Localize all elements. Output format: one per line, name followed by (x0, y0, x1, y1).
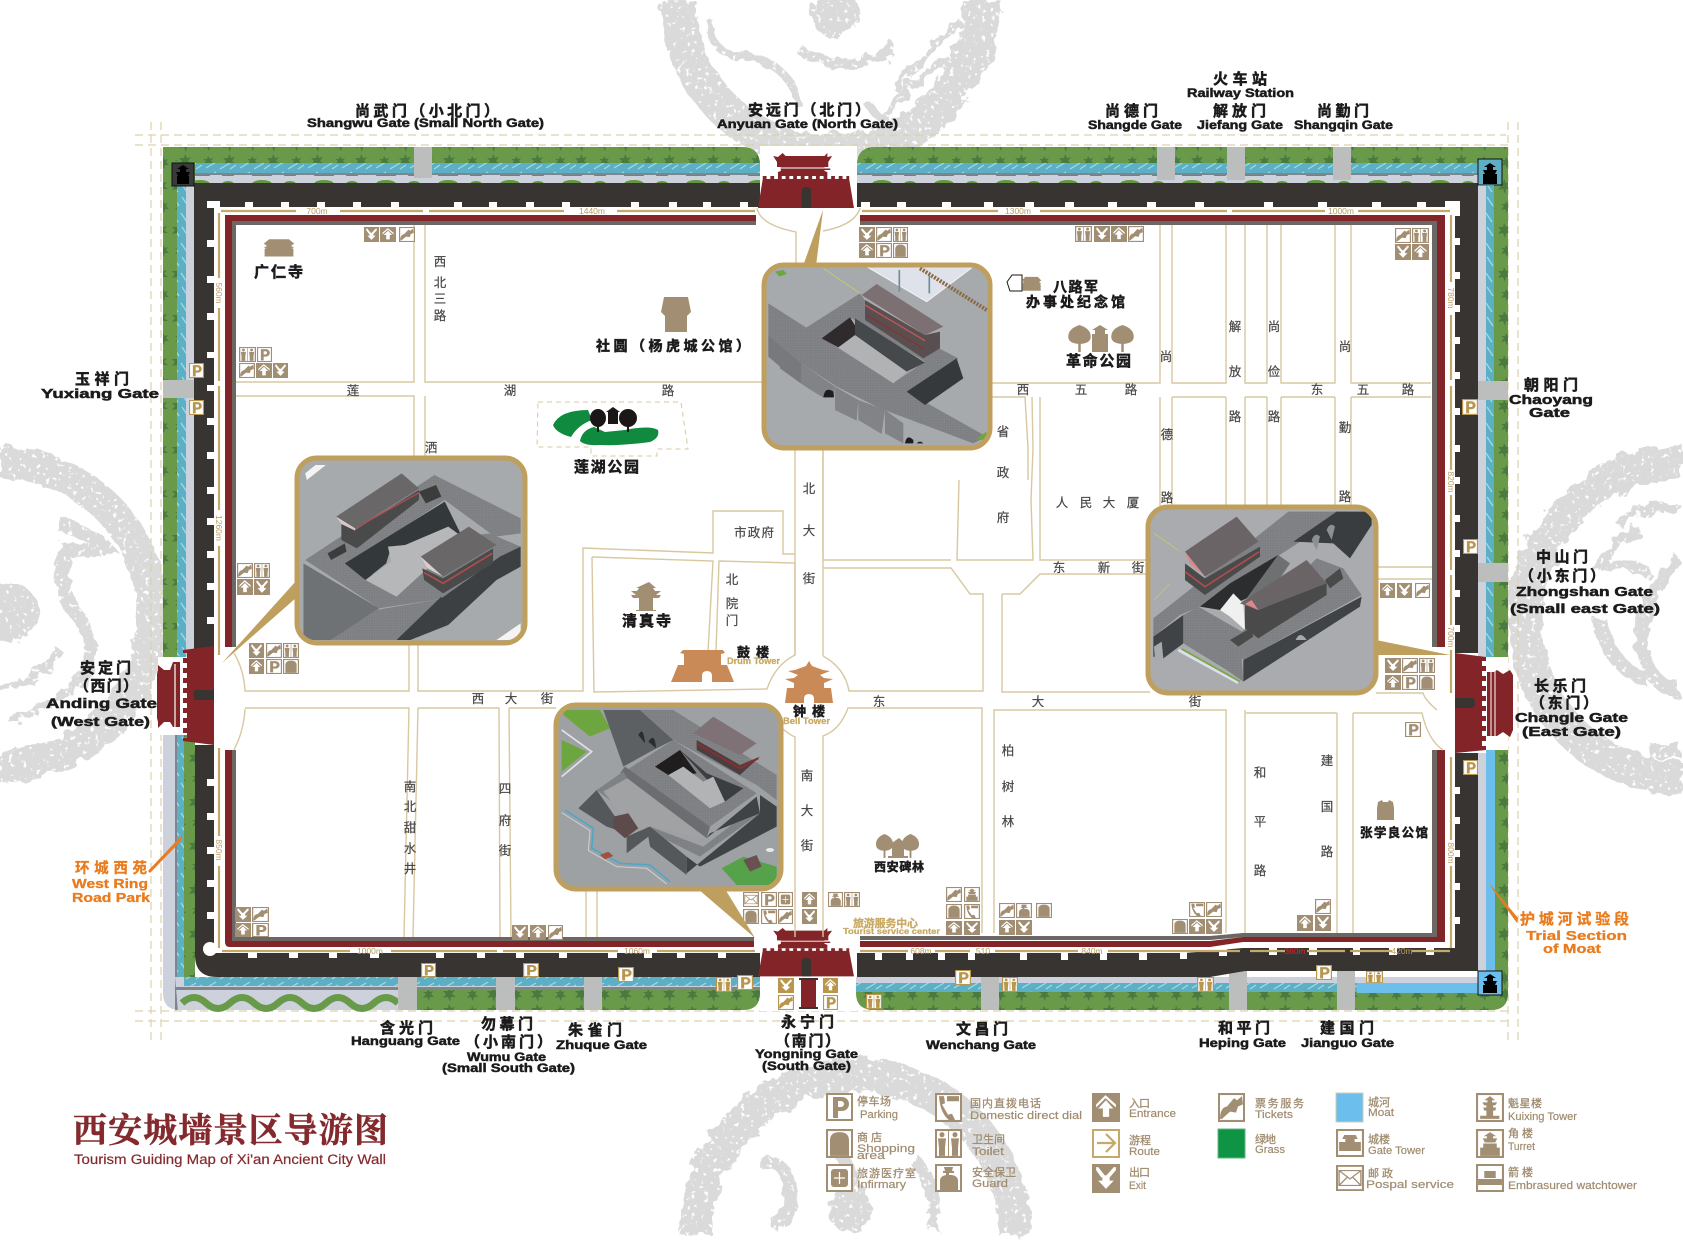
legend: parking: Parking (860, 1109, 898, 1121)
inset: south gate 3D (552, 701, 785, 938)
legend: grass: Grass (1255, 1144, 1286, 1156)
dimension labels: 1440m (579, 206, 605, 216)
legend: phone (936, 1094, 1082, 1122)
gate label: Wenchang (926, 1020, 1036, 1052)
road names: 莲 (347, 384, 360, 398)
dimension labels: 1060m (624, 946, 650, 956)
gate label: Changle: Changle Gate (1515, 710, 1628, 725)
gate label: Zhongshan: (Small east Gate) (1510, 601, 1660, 616)
dimension labels: 780m (1446, 287, 1456, 309)
dimension labels: 700m (1446, 626, 1456, 648)
road names: 府 (997, 510, 1009, 525)
road names: 大 (803, 524, 815, 538)
dimension labels: 850m (214, 839, 224, 861)
gate label: Jianguo: 建国门 (1320, 1019, 1374, 1037)
road names: 和 (1254, 766, 1266, 780)
park belt: south left (175, 977, 760, 1010)
gate label: Shangqin (1294, 102, 1393, 132)
inset: north gate 3D (760, 210, 996, 452)
gate label: Yuxiang (41, 370, 159, 401)
road names: 路 (1229, 409, 1242, 424)
legend: grass (1218, 1129, 1286, 1158)
road names: 路 (1254, 863, 1267, 878)
gate label: Chaoyang: Chaoyang (1509, 392, 1593, 407)
landmark: Eighth Route Army office (1007, 275, 1125, 310)
legend: shopping: area (857, 1150, 886, 1162)
road names: 路 (1321, 844, 1334, 859)
landmark: Great Mosque (622, 582, 671, 630)
road names: 街 (801, 839, 813, 853)
dimension labels: 1000m (1328, 206, 1354, 216)
gate label: Zhuque: 朱雀门 (568, 1021, 622, 1039)
road names: 街 (1132, 561, 1144, 575)
legend: shopping (827, 1130, 915, 1162)
dimension labels: 560m (214, 282, 224, 304)
road names: 尚 (1160, 350, 1172, 364)
park belt: west lower (163, 735, 195, 1010)
title (73, 1112, 388, 1167)
gate label: Heping: Heping Gate (1199, 1036, 1286, 1050)
road names: 树 (1002, 779, 1014, 794)
road names: 路 (1268, 409, 1281, 424)
gate label: Jianguo (1301, 1019, 1394, 1050)
gate label: Yuxiang: 玉祥门 (75, 370, 129, 388)
legend: gate tower (1337, 1130, 1425, 1157)
road names: 大 (801, 804, 813, 818)
landmark: Revolution Park (1066, 325, 1134, 370)
gate label: Zhongshan: （小东门） (1519, 567, 1605, 585)
landmark: Forest of Steles: 西安碑林 (874, 859, 924, 874)
dimension labels: 510 (976, 946, 990, 956)
medallion: top dragon (678, 0, 982, 152)
gate label: Wumu: (Small South Gate) (442, 1061, 575, 1075)
gate label: Hanguang: 含光门 (380, 1019, 433, 1037)
legend: gate tower: Gate Tower (1368, 1145, 1425, 1157)
gate label: Shangde (1088, 102, 1182, 132)
road names: 厦 (1127, 496, 1139, 510)
gate label: Shangqin: 尚勤门 (1317, 102, 1369, 120)
gate openings (760, 146, 857, 1011)
park belt: south right (856, 977, 1508, 1010)
legend: entrance: 入口 (1129, 1098, 1150, 1110)
park belt: top left (163, 147, 760, 183)
legend: exit (1092, 1164, 1150, 1193)
road names: 放 (1229, 364, 1242, 379)
gate label: Zhongshan (1510, 548, 1660, 616)
road names (347, 255, 1415, 878)
dimension labels: 700m (306, 206, 328, 216)
gate label: Anding: (West Gate) (51, 714, 150, 729)
landmark: Eighth Route Army office: 办事处纪念馆 (1026, 294, 1125, 310)
legend: shopping: Shopping (857, 1143, 915, 1155)
road names: 政 (997, 466, 1010, 480)
landmark: Lianhu Park (537, 402, 688, 476)
dimension labels: 1000m (357, 946, 383, 956)
gate label: Shangwu: 尚武门（小北门） (355, 102, 499, 120)
road names: 街 (541, 692, 553, 706)
legend: postal (1337, 1166, 1454, 1191)
callout: Trial Section of Moat: 护城河试验段 (1520, 910, 1629, 928)
gate label: Changle: （东门） (1530, 694, 1598, 712)
landmark: Zhang Xueliang residence (1360, 800, 1428, 840)
gate label: Anding: Anding Gate (46, 696, 158, 711)
gate label: Anyuan: 安远门（北门） (748, 101, 870, 119)
legend: infirmary: Infirmary (857, 1179, 907, 1191)
road names: 甜 (404, 821, 416, 835)
label: Railway Station: 火车站 (1213, 70, 1267, 88)
gate label: Wumu (442, 1015, 575, 1075)
medallion: left phoenix (0, 463, 152, 767)
legend: watchtower (1477, 1165, 1637, 1192)
gate: west (157, 646, 214, 745)
gate label: Yongning: (South Gate) (762, 1059, 851, 1073)
dashed guide lines (135, 122, 1518, 1045)
gate label: Yongning: Yongning Gate (755, 1047, 858, 1061)
road names: 人 (1056, 496, 1069, 510)
landmark: Tourist service center: Tourist service center (843, 926, 941, 936)
legend: guard: 安全保卫 (972, 1165, 1016, 1179)
gate label: Jiefang: 解放门 (1213, 102, 1266, 120)
road names: 省 (997, 425, 1009, 439)
road names: 路 (662, 383, 675, 398)
legend: toilet: Toilet (972, 1146, 1004, 1158)
gate label: Shangqin: Shangqin Gate (1294, 118, 1393, 132)
legend: entrance (1092, 1093, 1176, 1122)
gate label: Shangwu (307, 102, 544, 130)
road names: 街 (803, 572, 815, 586)
road names: 西 (434, 255, 446, 269)
legend: shopping: 商店 (857, 1130, 882, 1144)
title: Tourism Guiding Map of Xi'an Ancient City Wall (74, 1152, 386, 1167)
gate label: Yongning (755, 1013, 858, 1073)
road names: 北 (434, 276, 447, 290)
landmark: Forest of Steles (874, 834, 924, 874)
road names: 俭 (1268, 364, 1281, 379)
gate label: Changle: (East Gate) (1522, 724, 1621, 739)
legend: gate tower: 城楼 (1368, 1132, 1390, 1146)
callout: West Ring Road Park: Road Park (72, 890, 151, 905)
landmark: Tourist service center (843, 916, 941, 936)
legend: Kuixing tower (1477, 1094, 1577, 1123)
road names: 府 (499, 813, 511, 828)
gate: south (758, 928, 854, 976)
legend: route: Route (1129, 1146, 1160, 1158)
road names: 柏 (1002, 743, 1014, 758)
service icons on the map (235, 226, 1434, 940)
gate label: Jiefang (1197, 102, 1283, 132)
road names: 建 (1321, 754, 1334, 768)
legend: tickets: Tickets (1255, 1109, 1294, 1121)
landmark: Tourist service center: 旅游服务中心 (853, 916, 918, 930)
legend: Kuixing tower: Kuixing Tower (1508, 1111, 1577, 1123)
road names: 路 (1125, 382, 1138, 397)
wall body (194, 183, 1478, 977)
dimension labels: 420m (1391, 946, 1413, 956)
road names: 西 (1017, 383, 1029, 397)
callout: Trial Section of Moat: Trial Section (1526, 928, 1627, 943)
gate label: Hanguang: Hanguang Gate (351, 1034, 460, 1048)
landmark: Zhang Xueliang residence: 张学良公馆 (1360, 825, 1428, 840)
gate label: Chaoyang (1509, 376, 1593, 420)
landmark: Bell Tower: Bell Tower (783, 716, 831, 726)
landmark: Lianhu Park: 莲湖公园 (574, 459, 639, 476)
legend: turret: Turret (1508, 1141, 1535, 1153)
dimension labels: 1300m (1005, 206, 1031, 216)
legend: grass: 绿地 (1255, 1132, 1276, 1146)
legend: watchtower: 箭楼 (1508, 1165, 1533, 1179)
road names: 院 (726, 597, 739, 611)
legend: entrance: Entrance (1129, 1108, 1176, 1120)
landmark: Guangren Temple: 广仁寺 (254, 263, 303, 281)
landmark: Bell Tower: 钟楼 (793, 704, 825, 719)
dimension labels: 840m (1081, 946, 1103, 956)
callout: Trial Section of Moat: of Moat (1543, 941, 1602, 956)
legend: moat (1336, 1093, 1394, 1122)
south gate pavilion (799, 979, 818, 1008)
landmark: Yang Hucheng residence: 社圆（杨虎城公馆） (596, 338, 750, 354)
legend: infirmary: 旅游医疗室 (857, 1166, 916, 1180)
road names: 尚 (1339, 340, 1351, 354)
road names: 四 (499, 782, 511, 796)
legend: watchtower: Embrasured watchtower (1508, 1180, 1637, 1192)
road names: 西 (472, 692, 484, 706)
gate label: Shangde: Shangde Gate (1088, 118, 1182, 132)
legend: toilet: 卫生间 (972, 1132, 1005, 1146)
legend: exit: Exit (1129, 1180, 1146, 1192)
road names: 尚 (1268, 320, 1280, 334)
callout: West Ring Road Park: 环城西苑 (75, 859, 148, 877)
legend: route: 游程 (1129, 1134, 1151, 1147)
gate label: Yongning: 永宁门 (781, 1013, 834, 1031)
legend: turret (1477, 1126, 1535, 1157)
gate label: Chaoyang: Gate (1529, 405, 1570, 420)
park belt: west upper (163, 147, 195, 657)
legend: exit: 出口 (1129, 1165, 1150, 1179)
landmark: Revolution Park: 革命公园 (1066, 352, 1131, 370)
landmark: Great Mosque: 清真寺 (622, 612, 671, 630)
red inner wall line (225, 215, 1445, 947)
gate label: Shangde: 尚德门 (1105, 102, 1158, 120)
park belt: east (1478, 147, 1508, 1010)
medallion: right dragon (1525, 462, 1683, 778)
label: Railway Station: Railway Station (1187, 86, 1294, 100)
dimension labels: 1260m (214, 515, 224, 541)
dimension labels: 360m (1284, 946, 1306, 956)
road names: 街 (499, 844, 511, 858)
legend: phone: Domestic direct dial (970, 1110, 1082, 1122)
landmark: Bell Tower (783, 661, 833, 726)
dimension lines (219, 211, 1451, 951)
legend: parking (827, 1094, 898, 1121)
road names: 五 (1075, 383, 1087, 397)
legend: parking: 停车场 (857, 1094, 891, 1108)
landmark: Drum Tower: 鼓楼 (737, 645, 769, 660)
landmark: Drum Tower: Drum Tower (727, 656, 781, 666)
label: Railway Station (1187, 70, 1294, 100)
road names: 解 (1229, 320, 1241, 334)
road names: 洒 (425, 441, 437, 455)
gate label: Zhongshan: Zhongshan Gate (1516, 584, 1653, 599)
legend: postal: Pospal service (1366, 1179, 1454, 1191)
gate label: Heping: 和平门 (1218, 1019, 1270, 1037)
landmark: Drum Tower (671, 645, 781, 682)
road names: 市政府 (734, 525, 774, 540)
road names: 南 (404, 779, 416, 794)
road names: 门 (726, 613, 738, 628)
gate label: Wumu: 勿幕门 (481, 1015, 533, 1033)
inset: east gate 3D (1144, 503, 1450, 697)
landmark: Yang Hucheng residence (596, 297, 750, 354)
city wall map (157, 146, 1513, 1011)
gate label: Jianguo: Jianguo Gate (1301, 1036, 1394, 1050)
legend: infirmary (827, 1165, 916, 1191)
road names: 民 (1080, 496, 1092, 510)
legend: tickets: 票务服务 (1255, 1097, 1304, 1110)
dimension labels: 608m (910, 946, 932, 956)
road names: 大 (1032, 695, 1044, 709)
gate label: Changle: 长乐门 (1534, 677, 1586, 695)
road names: 水 (404, 842, 417, 856)
road names: 东 (1053, 561, 1065, 575)
legend: guard (936, 1165, 1016, 1191)
road names: 三 (434, 292, 446, 306)
road names: 北 (726, 573, 739, 587)
road names: 平 (1254, 815, 1266, 829)
gate label: Wumu: （小南门） (465, 1033, 552, 1051)
legend: moat: Moat (1368, 1107, 1394, 1119)
gate label: Zhongshan: 中山门 (1536, 548, 1588, 566)
road names: 街 (1189, 695, 1201, 709)
legend: postal: 邮政 (1368, 1166, 1393, 1180)
road network (234, 208, 1443, 937)
gate label: Anding (46, 659, 158, 729)
legend: tickets (1219, 1094, 1304, 1121)
legend: phone: 国内直拨电话 (970, 1096, 1041, 1110)
callout: West Ring Road Park (72, 835, 182, 905)
callout: Trial Section of Moat (1489, 883, 1629, 956)
road names: 德 (1161, 427, 1174, 442)
legend: toilet (936, 1130, 1005, 1158)
road names: 路 (1161, 490, 1174, 505)
wall crenellations (207, 201, 1460, 960)
gate label: Yuxiang: Yuxiang Gate (41, 386, 159, 401)
road names: 路 (1339, 489, 1352, 504)
road names: 大 (1103, 496, 1115, 510)
gate label: Wumu: Wumu Gate (467, 1050, 546, 1064)
road names: 大 (505, 692, 517, 706)
legend (827, 1093, 1637, 1193)
gate label: Chaoyang: 朝阳门 (1524, 376, 1578, 394)
dimension labels: 820m (1446, 471, 1456, 493)
callout: West Ring Road Park: West Ring (72, 876, 148, 891)
gate label: Jiefang: Jiefang Gate (1197, 118, 1283, 132)
landmark: Guangren Temple (254, 239, 303, 281)
road names: 东 (1311, 383, 1323, 397)
gate label: Anyuan (717, 101, 898, 131)
road names: 勤 (1339, 421, 1351, 435)
gate label: Wenchang: 文昌门 (956, 1020, 1008, 1038)
corner turrets (172, 159, 1502, 995)
road names: 湖 (504, 383, 516, 398)
road names: 五 (1357, 383, 1369, 397)
legend: Kuixing tower: 魁星楼 (1508, 1096, 1542, 1110)
road names: 井 (404, 862, 416, 876)
dimension labels (214, 206, 1456, 956)
legend: moat: 城河 (1368, 1096, 1390, 1109)
gate label: Shangwu: Shangwu Gate (Small North Gate) (307, 116, 544, 130)
title: 西安城墙景区导游图 (73, 1112, 388, 1150)
gate label: Heping (1199, 1019, 1286, 1050)
gold icons on the wall belt (190, 364, 1477, 1009)
road names: 新 (1098, 560, 1110, 575)
gate label: Anding: 安定门 (80, 659, 131, 677)
inset: west gate 3D (222, 454, 529, 663)
park belt: top right (857, 147, 1508, 183)
road names: 林 (1002, 815, 1015, 829)
gate: north (758, 153, 854, 208)
dimension labels: 800m (1446, 842, 1456, 864)
road names: 北 (803, 482, 816, 496)
gate label: Changle (1515, 677, 1628, 739)
road names: 路 (434, 308, 447, 323)
road names: 北 (404, 800, 417, 814)
legend: turret: 角楼 (1508, 1126, 1533, 1140)
road names: 南 (801, 768, 813, 783)
road names: 国 (1321, 800, 1333, 814)
gate label: Wenchang: Wenchang Gate (926, 1038, 1036, 1052)
gate bridges (163, 147, 1508, 1010)
gate: east (1455, 653, 1513, 753)
gate label: Anding: （西门） (74, 677, 138, 695)
gate label: Zhuque: Zhuque Gate (556, 1038, 647, 1052)
road names: 路 (1402, 382, 1415, 397)
gate label: Hanguang (351, 1019, 460, 1048)
gate label: Yongning: （南门） (775, 1032, 840, 1050)
medallion: bottom tile (695, 1075, 1015, 1235)
gate label: Zhuque (556, 1021, 647, 1052)
legend: guard: Guard (972, 1178, 1008, 1190)
landmark: Eighth Route Army office: 八路军 (1053, 279, 1098, 295)
legend: route (1093, 1130, 1160, 1158)
gate label: Anyuan: Anyuan Gate (North Gate) (717, 117, 898, 131)
road names: 东 (873, 695, 885, 709)
